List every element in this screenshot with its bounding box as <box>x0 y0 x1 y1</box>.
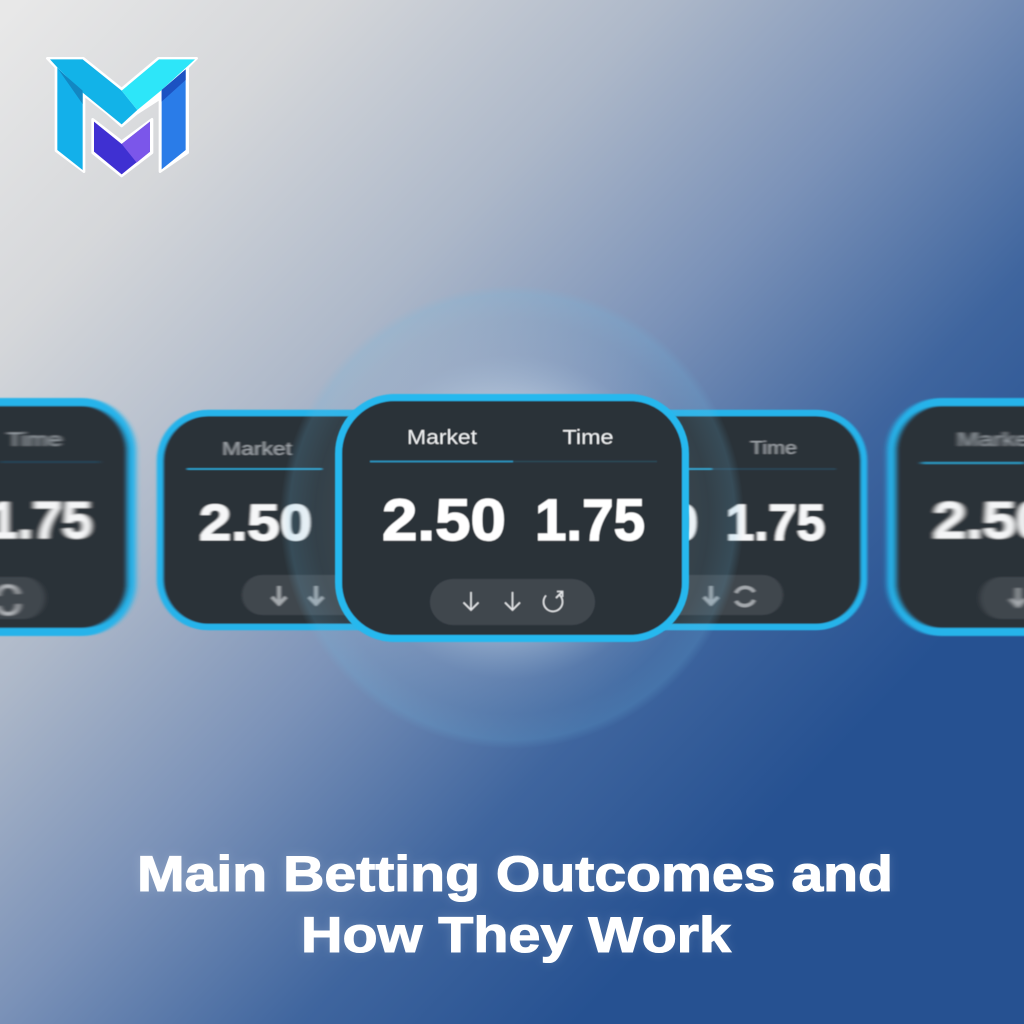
center card odds: 1.75: 1.75 <box>535 488 645 553</box>
second left card label: Market <box>222 438 292 459</box>
far right card label: Market <box>957 430 1024 451</box>
hidden partial odds: 0 <box>670 494 698 551</box>
far left card refresh icon <box>0 586 18 614</box>
card: far right, blurred <box>891 402 1024 632</box>
card: second right, blurred <box>537 413 864 627</box>
title <box>137 846 893 963</box>
icon: down arrow <box>464 592 478 610</box>
icon: refresh <box>544 592 563 611</box>
icon: down arrow <box>505 592 520 610</box>
center card body <box>338 398 686 638</box>
center card tab: Market: Market <box>407 427 478 449</box>
title line 1: Main Betting Outcomes and <box>137 846 893 902</box>
second left card odds: 2.50 <box>199 494 312 551</box>
center card button pill <box>430 579 595 625</box>
card: second left, blurred <box>160 413 487 627</box>
card: center <box>338 398 686 638</box>
far left card label: Time <box>7 430 62 451</box>
center card odds: 2.50: 2.50 <box>382 488 506 553</box>
logo mark shapes <box>50 59 195 174</box>
far right card arrow <box>1011 588 1024 606</box>
center card tab: Time: Time <box>562 427 614 449</box>
title line 2: How They Work <box>301 907 731 963</box>
logo white outline <box>47 58 197 176</box>
second right card odds: 1.75 <box>726 494 825 551</box>
halo glow behind center card <box>280 285 744 749</box>
logo <box>47 58 197 176</box>
second left card arrows <box>272 586 323 604</box>
second right card label: Time <box>750 437 797 458</box>
second right card icons <box>704 586 754 606</box>
card: far left, blurred <box>0 402 132 632</box>
